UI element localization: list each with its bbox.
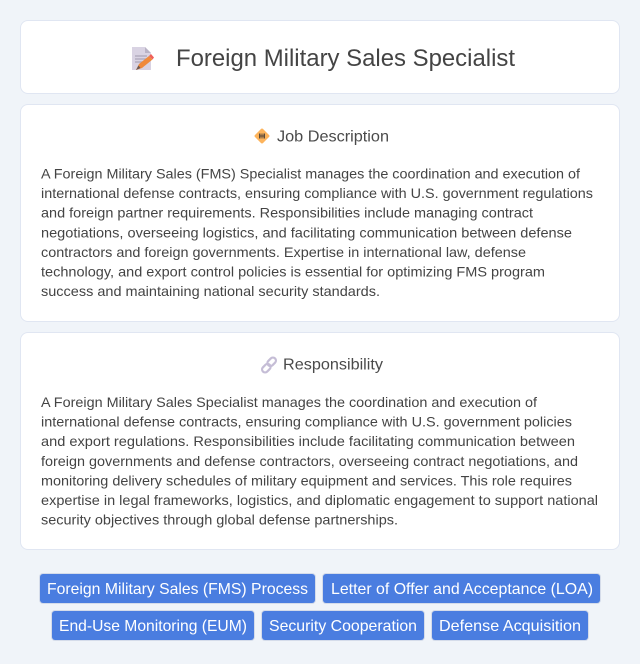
tags — [39, 573, 601, 641]
tag: security cooperation — [262, 611, 424, 640]
tag: defense acquisition: Defense Acquisition — [439, 618, 581, 635]
tag: security cooperation: Security Cooperation — [269, 618, 417, 635]
tag: defense acquisition — [432, 611, 588, 640]
icon: document with pencil — [132, 47, 154, 70]
title: Foreign Military Sales Specialist — [176, 45, 515, 72]
tag: EUM — [52, 611, 254, 640]
panel: job description: and foreign partner requirements. Responsibilities include managing contract — [41, 205, 533, 221]
panel: responsibility: security objectives through global defense partnerships. — [41, 512, 398, 528]
icon: diamond road sign — [254, 128, 270, 144]
icon: chain link — [261, 356, 277, 374]
tag: FMS process — [40, 574, 315, 603]
heading: job description: Job Description — [277, 128, 389, 146]
panel: job description: A Foreign Military Sales (FMS) Specialist manages the coordination and execution of — [41, 166, 580, 182]
panel: job description: success and maintaining national security standards. — [41, 283, 380, 299]
panel: responsibility: international defense contracts, ensuring compliance with U.S. government policies — [41, 414, 572, 430]
panel: job description: negotiations, overseeing logistics, and facilitating communication between defense — [41, 224, 572, 240]
text block: job description — [41, 166, 593, 299]
panel: job description: international defense contracts, ensuring compliance with U.S. government regulations — [41, 185, 593, 201]
panel: responsibility: monitoring delivery schedules of military equipment and services. This role requires — [41, 472, 572, 488]
tag: EUM: End-Use Monitoring (EUM) — [59, 618, 247, 635]
heading: responsibility: Responsibility — [283, 356, 383, 374]
panel: job description — [20, 104, 620, 322]
panel: responsibility: foreign governments and defense contractors, overseeing contract negotiations, and — [41, 453, 578, 469]
panel: responsibility: A Foreign Military Sales Specialist manages the coordination and execution of — [41, 394, 537, 410]
text block: responsibility — [41, 394, 598, 528]
panel: job description: contractors and foreign governments. Expertise in international law, defense — [41, 244, 526, 260]
panel: job description: technology, and export control policies is essential for optimizing FMS program — [41, 264, 545, 280]
panel: responsibility: expertise in legal frameworks, logistics, and diplomatic engagement to support national — [41, 492, 598, 508]
panel: responsibility: and export regulations. Responsibilities include facilitating communication between — [41, 433, 575, 449]
tag: LOA: Letter of Offer and Acceptance (LOA) — [331, 581, 593, 598]
tag: LOA — [323, 574, 600, 603]
panel: title card — [20, 20, 620, 94]
tag: FMS process: Foreign Military Sales (FMS) Process — [47, 581, 308, 598]
panel: responsibility — [20, 332, 620, 550]
